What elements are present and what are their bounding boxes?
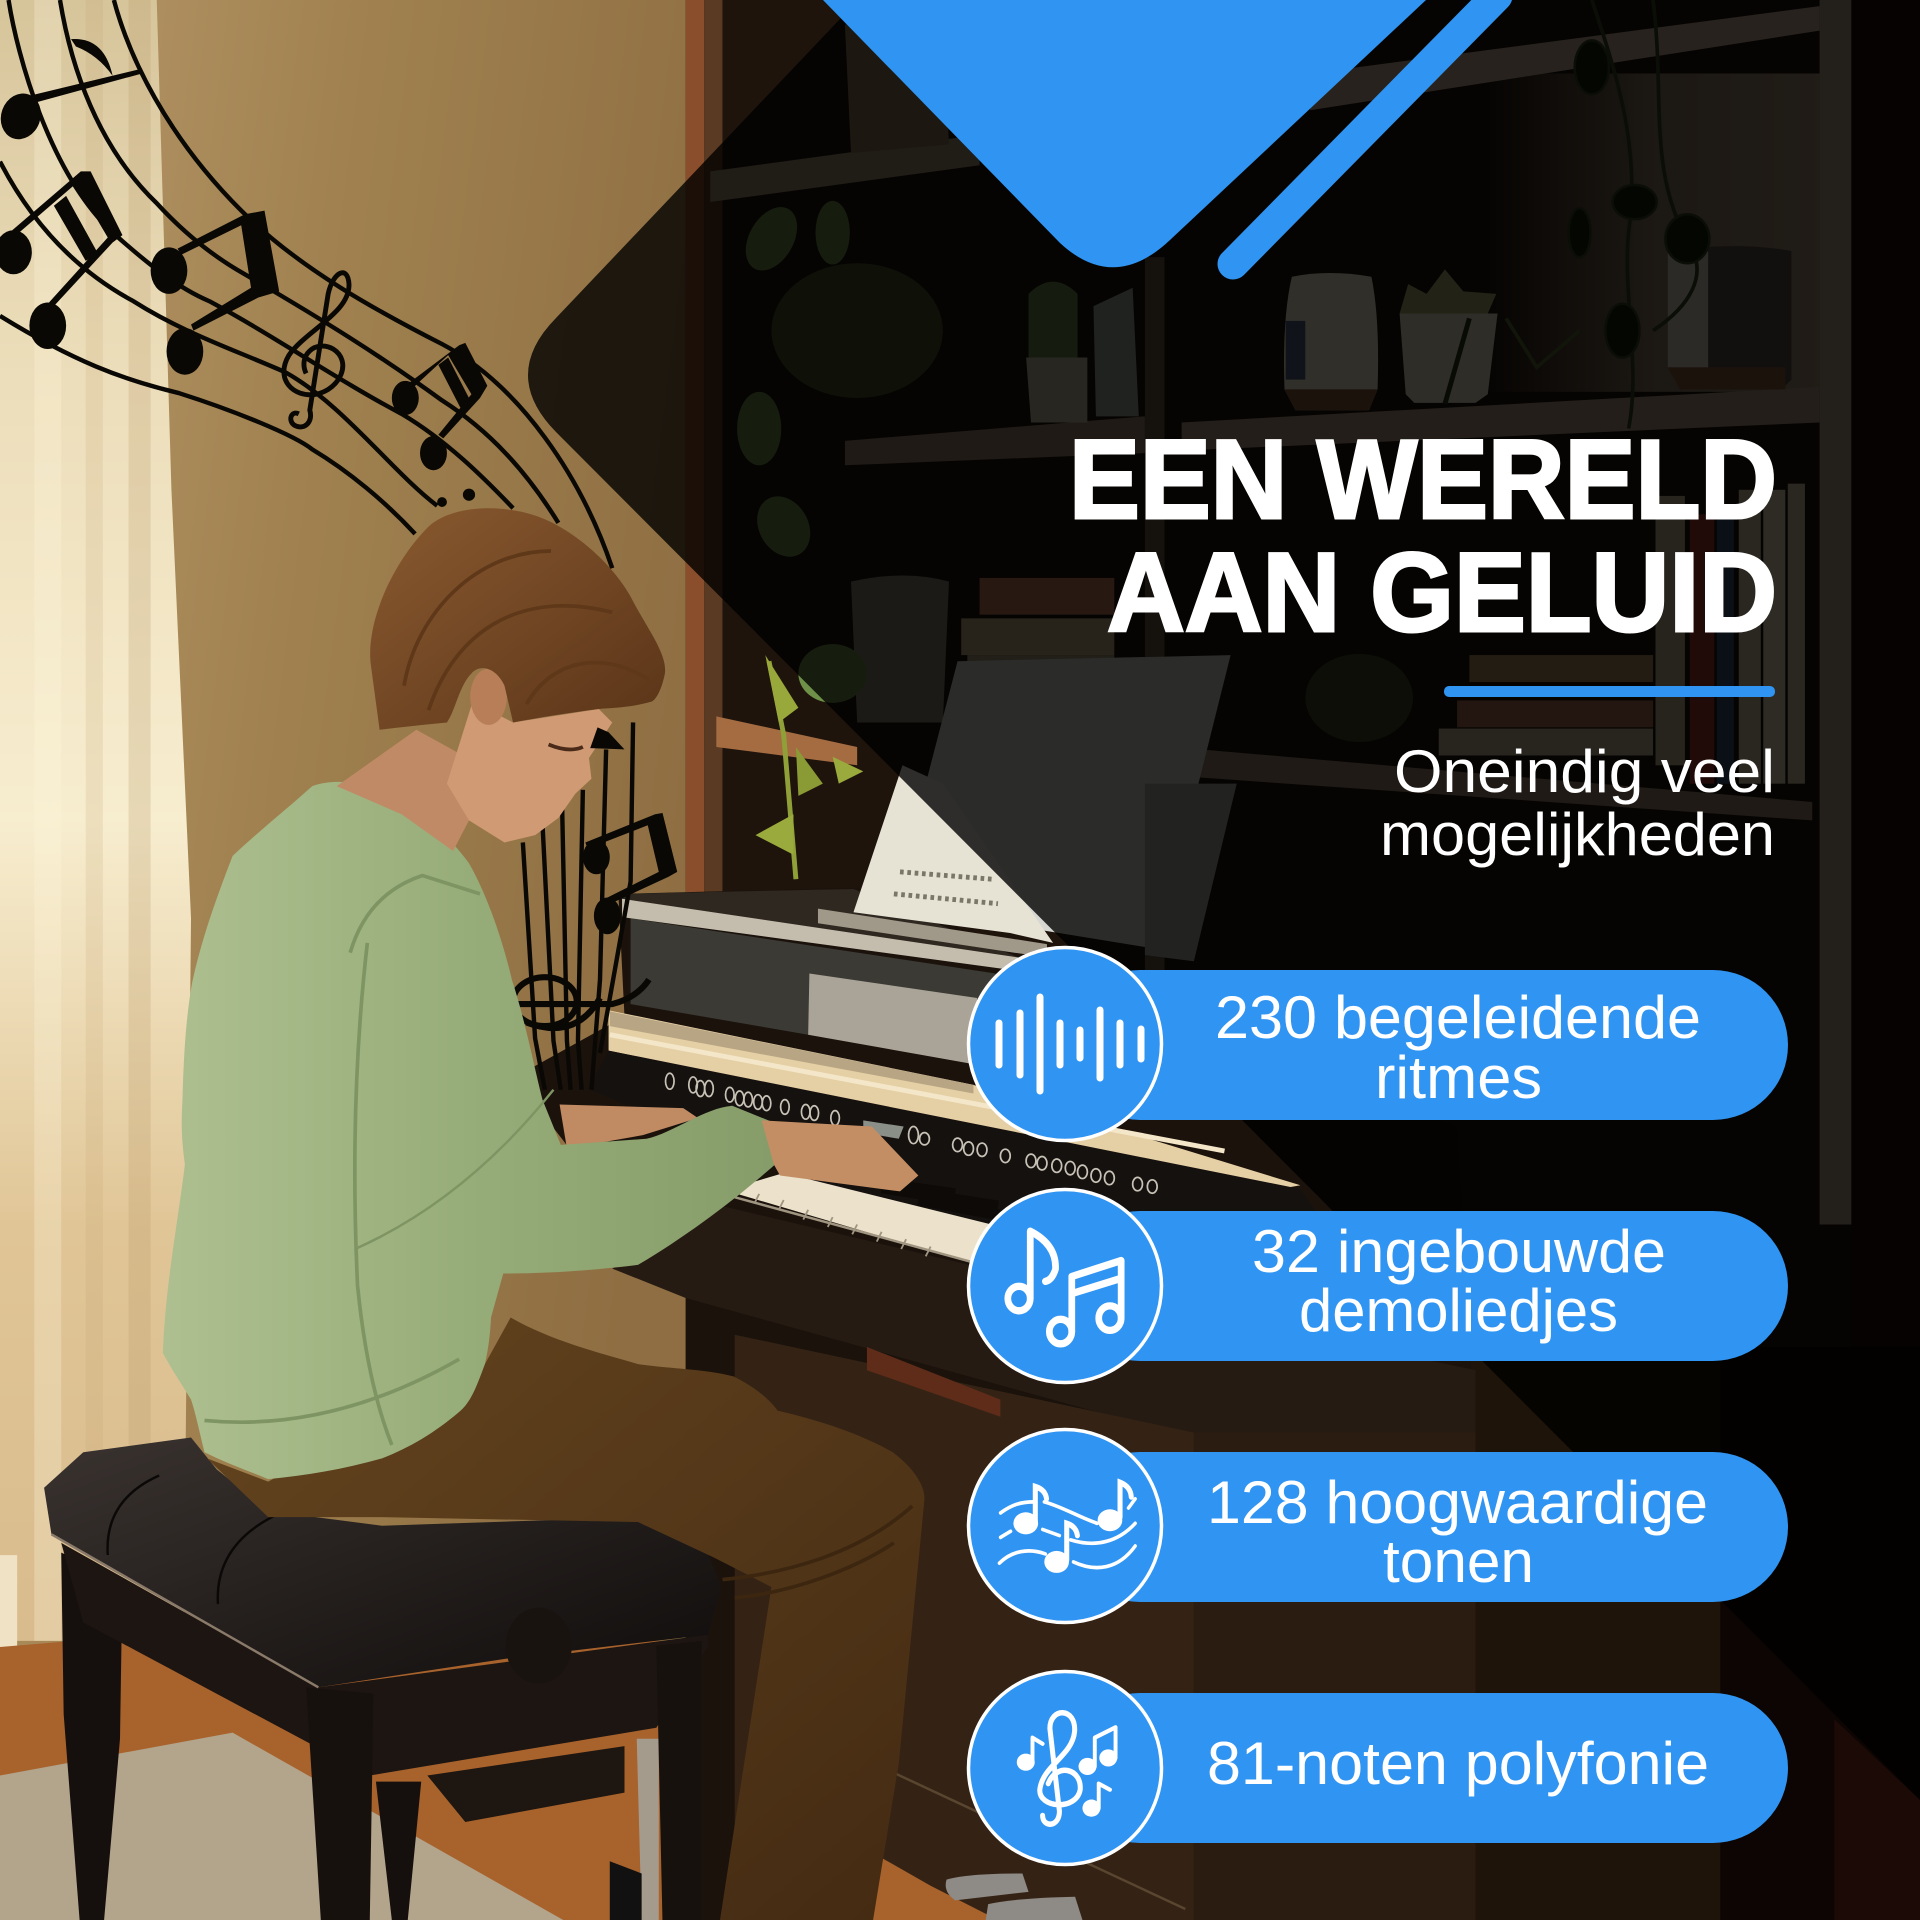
- subtitle: [1380, 738, 1775, 868]
- black keys: [808, 1167, 1010, 1217]
- feature: 32 ingebouwde demoliedjes: [968, 1190, 1788, 1382]
- lower vase: [851, 576, 949, 722]
- neck: [337, 730, 514, 851]
- near hand: [762, 1120, 918, 1191]
- lower clef over piano: [512, 977, 649, 1028]
- pill text: 32 ingebouwde: [1252, 1218, 1666, 1285]
- face: [447, 702, 612, 842]
- stool: [44, 1438, 721, 1920]
- feature: 81-noten polyfonie: [968, 1672, 1788, 1864]
- pill text: [1215, 984, 1701, 1111]
- pill text: tonen: [1383, 1528, 1534, 1595]
- display: [863, 1120, 904, 1139]
- subtitle: Oneindig veel: [1394, 738, 1775, 805]
- eye: [549, 744, 583, 749]
- succulent planter: [1400, 313, 1498, 403]
- title rule: [1444, 686, 1775, 697]
- piano body: [514, 888, 1920, 1920]
- pill text: [1252, 1218, 1666, 1344]
- dark pot: [1668, 246, 1791, 389]
- boy: [163, 508, 924, 1920]
- rug: [0, 1733, 563, 1920]
- white keys: [725, 1173, 1016, 1264]
- lit vine: [756, 655, 863, 879]
- pill: [1065, 1452, 1788, 1602]
- top surface: [622, 889, 1019, 958]
- knobs: [666, 1073, 1157, 1193]
- icon: notes on waves: [999, 1482, 1135, 1573]
- trousers: [207, 1318, 924, 1920]
- icon circle: [968, 1190, 1162, 1382]
- pill text: 128 hoogwaardige: [1207, 1469, 1708, 1536]
- music stand and sheet music: [818, 655, 1237, 961]
- pedals: [946, 1873, 1029, 1900]
- pill: [1065, 1211, 1788, 1361]
- icon: music notes: [1008, 1231, 1121, 1344]
- pill text: [1207, 1469, 1708, 1595]
- icon circle: [968, 1672, 1162, 1864]
- pill text: 81-noten polyfonie: [1207, 1730, 1709, 1797]
- feature: 128 hoogwaardige tonen: [968, 1430, 1788, 1622]
- pill text: ritmes: [1375, 1044, 1542, 1111]
- upper left books: [845, 18, 949, 153]
- pill text: 230 begeleidende: [1215, 984, 1701, 1051]
- hair: [370, 508, 665, 730]
- title: [1069, 417, 1777, 655]
- rails: [609, 1010, 1300, 1189]
- shelf pots and vases: [845, 18, 1791, 722]
- dark diagonal overlay panel: [528, 0, 1920, 1800]
- title: AAN GELUID: [1107, 530, 1777, 655]
- curtain: [0, 0, 191, 1665]
- pill text: demoliedjes: [1299, 1277, 1618, 1344]
- right hanging plant: [1506, 0, 1709, 429]
- patterned vase: [1284, 273, 1378, 410]
- pill: [1065, 1693, 1788, 1843]
- left hanging plant: [735, 198, 1413, 742]
- icon circle: [968, 948, 1162, 1140]
- feature: 230 begeleidende ritmes: [968, 948, 1788, 1140]
- keyboard label strip: [867, 1347, 1000, 1417]
- icon: sound wave: [999, 997, 1141, 1091]
- floor: [0, 1641, 735, 1920]
- small planter: [1026, 358, 1087, 422]
- note flag over face: [590, 727, 624, 749]
- music notes: [0, 39, 677, 934]
- baseboard and floor: [887, 1769, 1185, 1909]
- treble clef on staff: [284, 273, 349, 427]
- blue diagonal stripe: [1233, 0, 1497, 264]
- wall: [0, 0, 735, 1714]
- sweater: [163, 782, 775, 1479]
- subtitle: mogelijkheden: [1380, 801, 1775, 868]
- title: EEN WERELD: [1069, 417, 1777, 542]
- sheet music staff lines: [0, 0, 633, 1090]
- shelf books: [961, 484, 1805, 784]
- bookcase: [686, 0, 1920, 1469]
- control panel: [588, 1051, 1316, 1231]
- ear: [470, 669, 507, 725]
- pill: [1065, 970, 1788, 1120]
- icon: treble clef with notes: [1017, 1713, 1117, 1824]
- blue triangle: [823, 0, 1426, 267]
- far hand: [560, 1104, 698, 1149]
- icon circle: [968, 1430, 1162, 1622]
